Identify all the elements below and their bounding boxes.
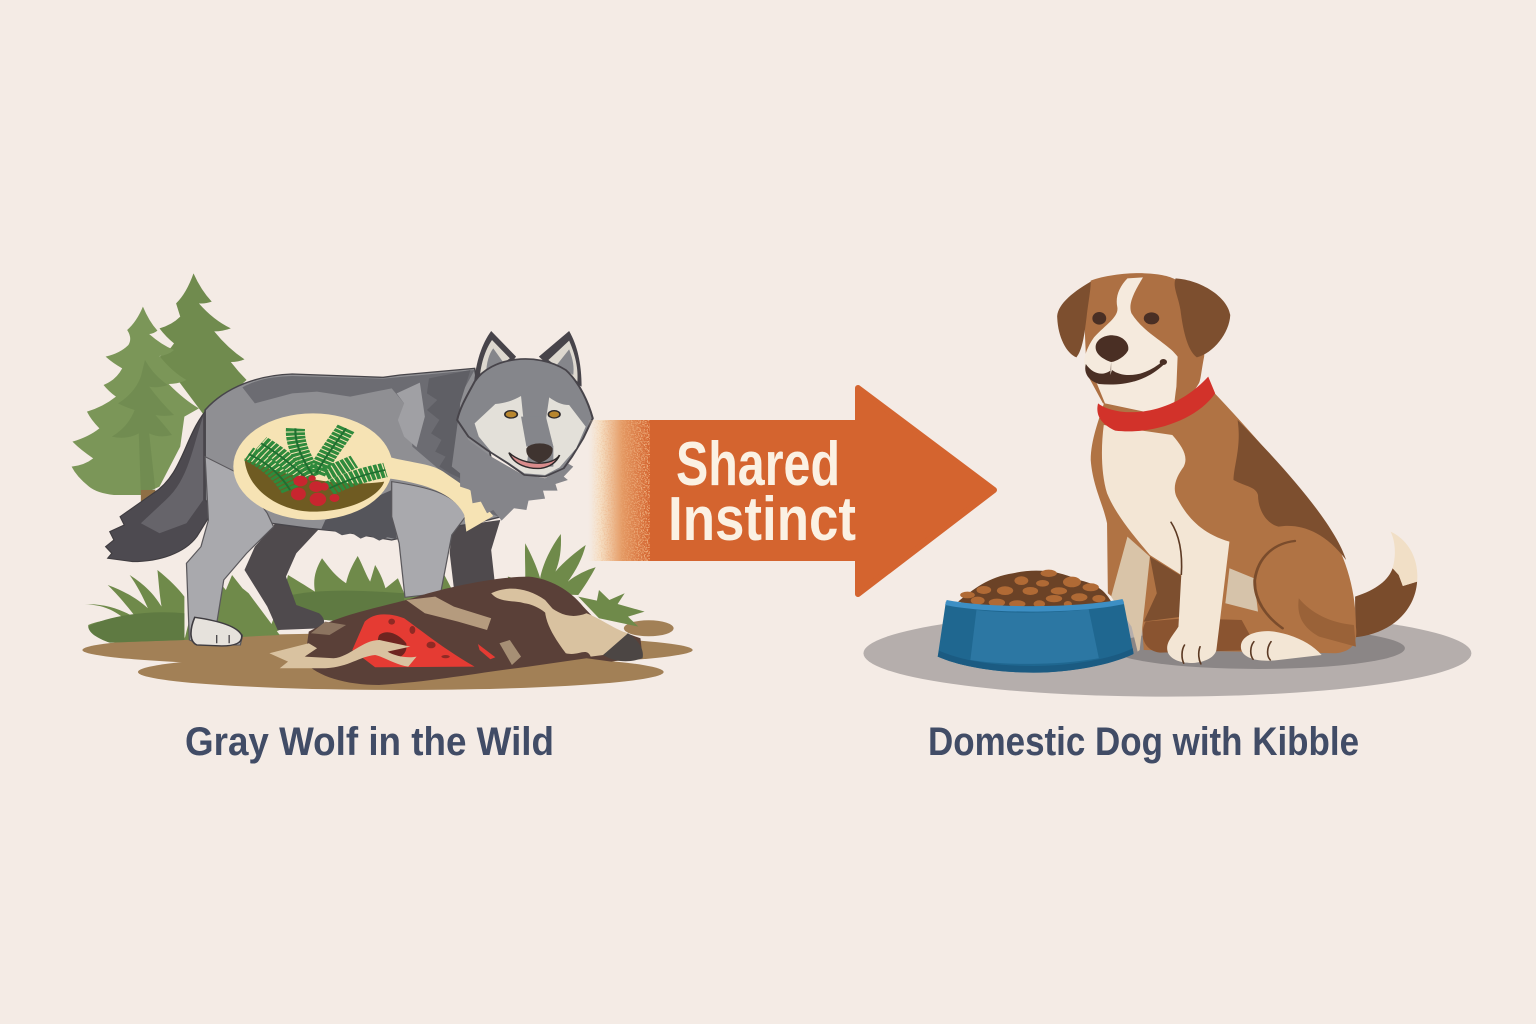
pale fur band	[397, 383, 425, 447]
underbelly fringe	[321, 490, 397, 541]
near front leg	[392, 482, 465, 597]
ground shadow	[863, 610, 1471, 697]
left ear	[1057, 282, 1091, 357]
left ear	[474, 331, 516, 388]
label: gray wolf: Gray Wolf in the Wild	[185, 720, 554, 764]
arrow text	[668, 430, 856, 554]
food bowl	[938, 570, 1134, 673]
back foreleg	[1111, 537, 1150, 652]
white blaze and muzzle	[1084, 277, 1178, 417]
belly	[1225, 568, 1258, 612]
right ear	[539, 331, 582, 387]
kibble pile	[958, 570, 1111, 608]
front paw toes	[1182, 645, 1201, 664]
icon: front pine tree	[72, 307, 199, 502]
snout	[521, 417, 553, 447]
arrow labelled Shared Instinct	[588, 388, 994, 594]
cream connector and chest	[388, 457, 493, 532]
flesh spots	[388, 619, 450, 658]
far front leg	[450, 520, 500, 588]
head	[1057, 273, 1230, 420]
nose	[1096, 335, 1128, 362]
stomach contents: red berries	[291, 475, 339, 506]
hind foot	[1143, 618, 1258, 653]
dark wound hole	[378, 632, 407, 657]
white face mask	[475, 396, 586, 475]
cream chest and front leg	[1102, 425, 1229, 663]
exposed red flesh	[352, 614, 475, 667]
grass shadow mounds	[88, 591, 404, 643]
muzzle tip	[603, 633, 643, 661]
dark neck stripes	[427, 370, 470, 480]
body	[1091, 392, 1356, 653]
bowl highlight face	[970, 609, 1099, 664]
bowl rim	[945, 599, 1124, 612]
near hind leg	[186, 457, 274, 645]
red collar	[1097, 377, 1215, 431]
carcass body	[305, 577, 643, 685]
eyes	[1092, 312, 1159, 325]
bowl body	[938, 601, 1134, 673]
haunch shade	[1298, 598, 1356, 647]
hind paw	[1241, 631, 1322, 661]
right ear	[1175, 278, 1230, 357]
chest leg line	[1171, 522, 1182, 575]
arrow text: Shared	[676, 430, 840, 499]
haunch crease	[1255, 541, 1295, 628]
torn fur edge	[311, 622, 346, 635]
bowl base band	[938, 648, 1134, 673]
bone-like limb	[269, 640, 417, 668]
stomach cutaway bubble	[233, 413, 393, 520]
body	[205, 368, 502, 540]
arrow text: Instinct	[668, 485, 856, 554]
neck ruff	[452, 420, 573, 521]
eyes	[505, 411, 560, 418]
label: domestic dog: Domestic Dog with Kibble	[928, 720, 1359, 764]
wolf	[106, 331, 593, 646]
grass tufts	[85, 534, 645, 643]
icon: back pine tree	[160, 273, 247, 417]
dark saddle patch	[1234, 420, 1346, 560]
nose	[526, 443, 553, 463]
ground: dirt patches	[82, 620, 693, 690]
head brown	[1085, 273, 1205, 420]
near hind paw	[191, 617, 242, 646]
tail	[1355, 532, 1417, 637]
panel: domestic dog with kibble	[863, 273, 1471, 697]
pale fur patches and snout	[406, 589, 628, 665]
mouth	[1085, 362, 1163, 385]
wolf head	[457, 331, 593, 477]
shaded back and fur bands	[242, 370, 502, 518]
far hind leg	[244, 523, 324, 630]
arrow shape	[588, 388, 994, 594]
shadow between legs	[1144, 557, 1183, 622]
stomach contents: soil	[244, 458, 384, 512]
panel: gray wolf in the wild	[72, 273, 693, 690]
carcass	[269, 577, 643, 685]
dog	[1057, 273, 1417, 664]
stomach contents: green sprigs	[249, 428, 385, 490]
mouth	[509, 453, 560, 468]
face	[457, 359, 593, 477]
tail	[106, 407, 209, 562]
